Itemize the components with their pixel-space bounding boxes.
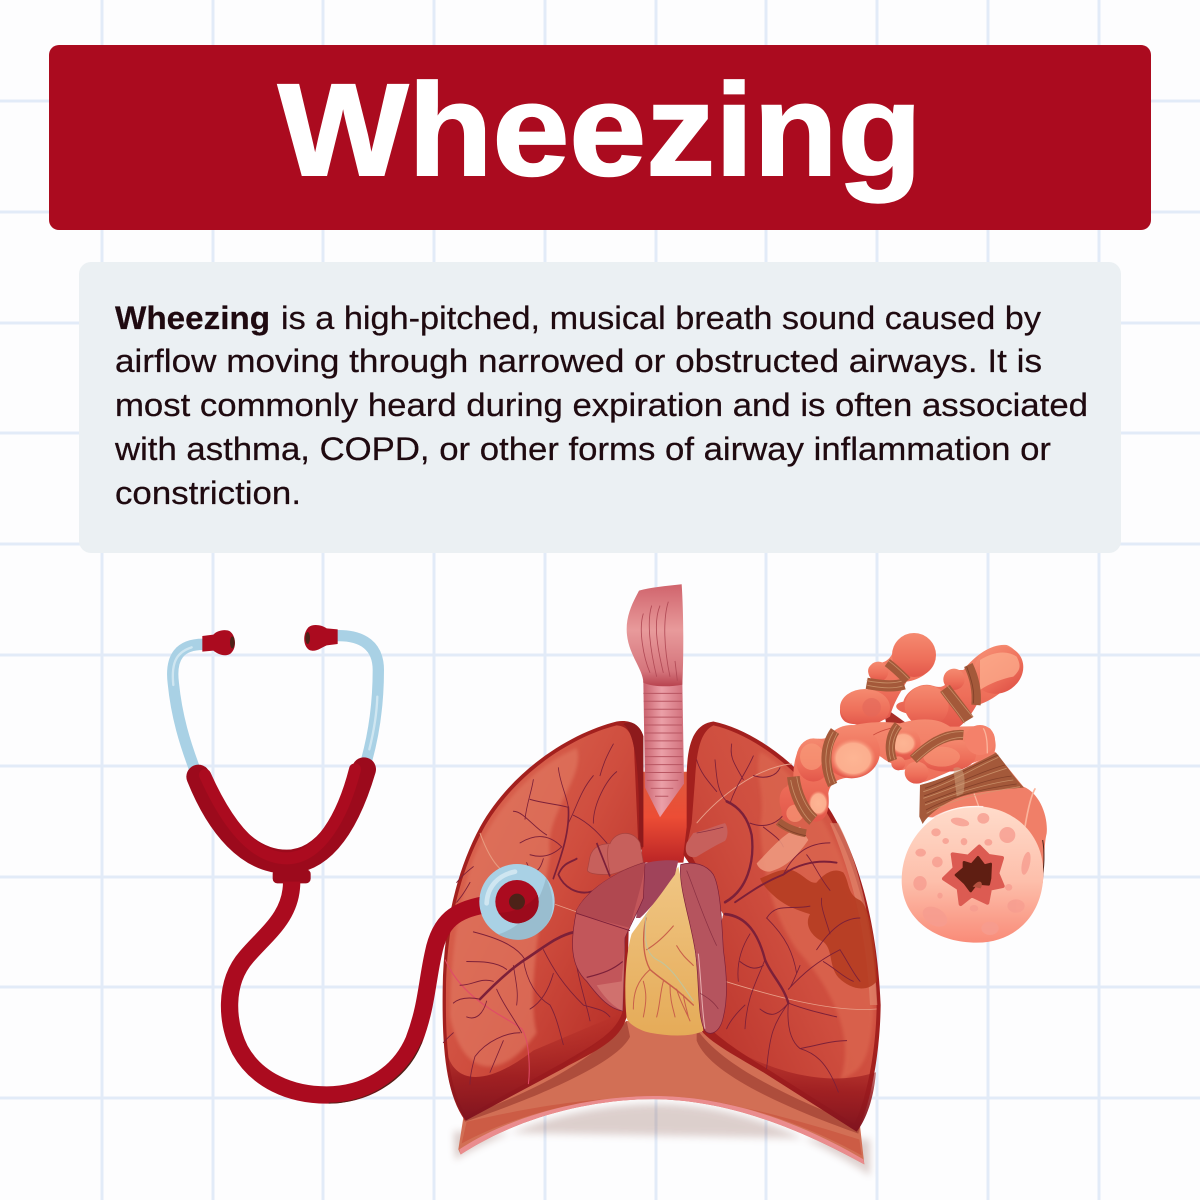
text block: definition: most commonly heard during expiration and is often associated bbox=[115, 387, 1088, 423]
earpiece left bbox=[202, 630, 235, 655]
text block: definition: with asthma, COPD, or other forms of airway inflammation or bbox=[114, 431, 1051, 467]
airway disc bbox=[902, 806, 1043, 943]
panel: definition text bbox=[79, 262, 1121, 553]
binaural yoke bbox=[198, 769, 364, 883]
left lung veins bbox=[443, 744, 617, 1084]
tubing bbox=[230, 882, 483, 1095]
diaphragm shadow bbox=[453, 1104, 870, 1175]
illustration: lungs with trachea and heart bbox=[443, 584, 881, 1175]
text block: definition: airflow moving through narrowed or obstructed airways. It is bbox=[115, 343, 1042, 379]
lung damage patch bbox=[760, 870, 877, 988]
text block: definition bbox=[114, 300, 1088, 511]
right lung bbox=[683, 721, 881, 1132]
heart vessels bbox=[587, 823, 727, 877]
ear tube right bbox=[337, 636, 378, 760]
left lung bbox=[443, 721, 643, 1121]
title banner bbox=[49, 45, 1151, 230]
shadow behind branches bbox=[883, 707, 957, 737]
fissures bbox=[697, 764, 792, 823]
back of airway tube bbox=[922, 752, 1047, 883]
middle trunk bbox=[780, 719, 996, 822]
title: Wheezing bbox=[278, 56, 922, 203]
aortic arch bbox=[642, 772, 689, 863]
upper left branch bbox=[840, 637, 935, 724]
mucus spots bbox=[913, 813, 1032, 935]
right lung veins bbox=[697, 744, 860, 1092]
earpiece right bbox=[304, 625, 338, 651]
constricted lumen bbox=[944, 847, 1003, 904]
overlay on lung bbox=[757, 827, 808, 872]
illustration: stethoscope bbox=[173, 625, 555, 1104]
text block: definition: constriction. bbox=[115, 475, 301, 511]
illustration: bronchiole cross-section bbox=[757, 633, 1047, 943]
lung lobe left bbox=[573, 863, 645, 1011]
branches bbox=[780, 633, 1033, 822]
muscle bands bbox=[778, 661, 1024, 836]
diaphragm bbox=[458, 1021, 864, 1164]
chest piece bbox=[479, 864, 555, 940]
text block: definition: is a high-pitched, musical breath sound caused by bbox=[281, 300, 1041, 336]
upper right branch bbox=[896, 645, 1021, 728]
ear tube left bbox=[173, 644, 203, 770]
heart bbox=[625, 867, 703, 1035]
lung lobe right bbox=[680, 863, 726, 1033]
larynx bbox=[627, 584, 683, 686]
text block: definition: Wheezing bbox=[115, 300, 270, 336]
trachea bbox=[643, 681, 684, 817]
heart center strip bbox=[636, 860, 678, 918]
fissure bbox=[445, 960, 529, 1084]
